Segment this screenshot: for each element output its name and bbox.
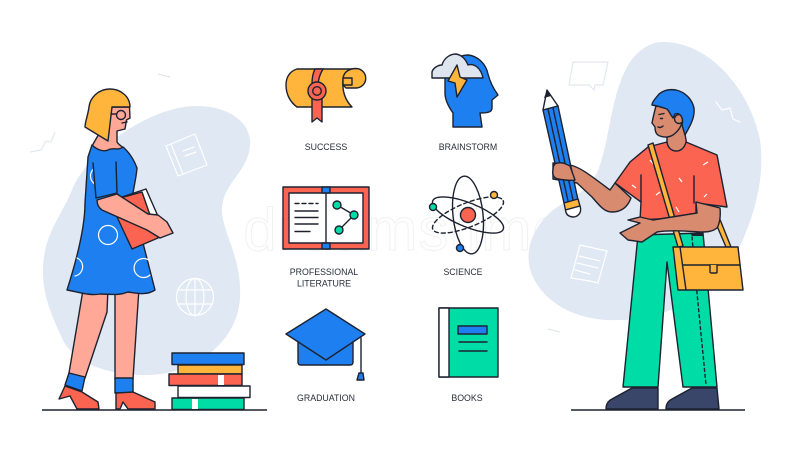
- lightning bolt: [448, 65, 467, 97]
- spine tabs: [322, 187, 330, 193]
- front sock: [115, 378, 133, 393]
- network nodes: [337, 205, 354, 230]
- raised arm: [553, 163, 631, 212]
- front leg: [115, 288, 139, 379]
- smile: [122, 122, 127, 123]
- right illustration: man with pencil: [529, 42, 761, 410]
- decorative speech bubble: [569, 62, 608, 90]
- ribbon: [312, 69, 323, 122]
- watermark: dreamstime: [243, 196, 567, 263]
- decorative document: [571, 245, 607, 283]
- seal: [308, 82, 326, 100]
- forearm and hand: [97, 194, 173, 238]
- ground line: [42, 409, 267, 411]
- decorative dash: [548, 329, 560, 332]
- glasses: [112, 110, 126, 120]
- shirt: [615, 142, 727, 220]
- shirt details: [632, 160, 708, 212]
- lower arm and hand: [620, 202, 720, 242]
- held book: [117, 189, 158, 249]
- right background blob: [529, 42, 761, 320]
- front strap: [648, 143, 683, 247]
- book stack: [169, 353, 250, 410]
- hair: [652, 90, 694, 135]
- decorative zigzag: [30, 132, 55, 152]
- pencil: [543, 90, 581, 217]
- trouser seam: [692, 237, 706, 385]
- cloud: [432, 54, 483, 78]
- label: graduation: GRADUATION: [297, 393, 355, 403]
- icon: science atom: [428, 175, 508, 255]
- back leg: [69, 288, 108, 378]
- icon: brainstorm head: [432, 54, 498, 127]
- back strap: [717, 217, 731, 247]
- icon: professional literature open book: [283, 187, 369, 249]
- neck: [667, 122, 687, 152]
- neck and face: [92, 107, 130, 154]
- decorative globe icon: [176, 278, 214, 316]
- right shoe: [666, 388, 719, 409]
- label: professional literature: LITERATURE: [297, 278, 351, 288]
- hair: [85, 89, 130, 141]
- dress polka dots: [75, 166, 150, 277]
- decorative dash: [158, 74, 170, 77]
- fingers on pencil: [553, 163, 575, 180]
- icon: success scroll: [286, 68, 366, 122]
- back shoe: [59, 386, 99, 409]
- sleeve: [93, 162, 117, 198]
- left shoe: [606, 388, 658, 409]
- trousers: [623, 233, 717, 387]
- back sock: [65, 373, 85, 391]
- label: books: BOOKS: [451, 393, 483, 403]
- shirt folds: [641, 175, 694, 203]
- text lines: [295, 202, 318, 204]
- decorative zigzag: [716, 102, 740, 122]
- satchel bag: [673, 247, 743, 290]
- smile: [658, 126, 663, 127]
- belt shadow: [690, 233, 703, 236]
- front shoe: [116, 392, 155, 409]
- label: professional literature: PROFESSIONAL: [290, 267, 358, 277]
- eye and brow: [659, 114, 664, 118]
- icon: graduation cap: [286, 309, 365, 380]
- label: science: SCIENCE: [443, 267, 483, 277]
- ear: [674, 114, 684, 124]
- left illustration: woman with books: [30, 74, 267, 410]
- dress: [67, 145, 155, 295]
- face: [652, 104, 682, 137]
- icon: books: [439, 308, 498, 377]
- decorative book icon: [166, 134, 207, 176]
- label: success: SUCCESS: [305, 142, 347, 152]
- label: brainstorm: BRAINSTORM: [439, 142, 497, 152]
- left background blob: [43, 106, 250, 375]
- ground line: [571, 409, 745, 411]
